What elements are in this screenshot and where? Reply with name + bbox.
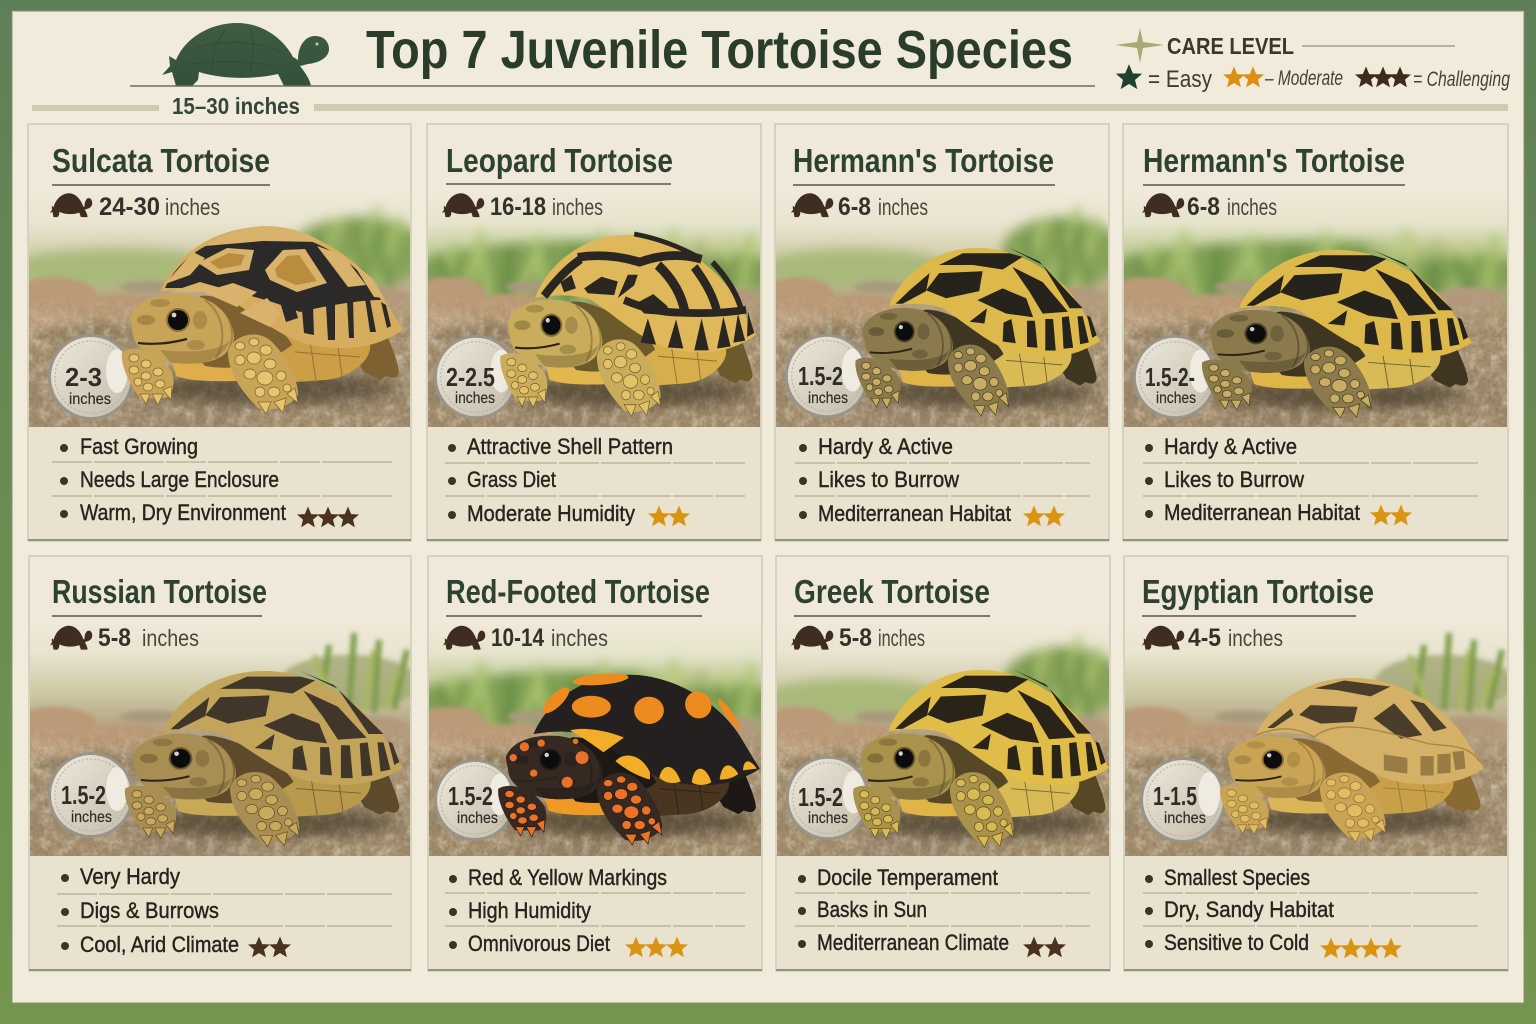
traits: Omnivorous Diet (468, 931, 610, 956)
title: Top 7 Juvenile Tortoise Species (366, 20, 1073, 80)
adult size: 5-8 (98, 624, 131, 652)
heading: Hermann's Tortoise (1143, 142, 1405, 179)
adult size: inches (1228, 625, 1283, 651)
adult size: inches (551, 625, 608, 651)
juvenile size text: inches (808, 810, 848, 827)
juvenile size text: 2-2.5 (446, 362, 495, 392)
rating stars (1320, 938, 1402, 958)
traits: Fast Growing (80, 434, 198, 459)
adult size (442, 193, 603, 221)
juvenile size text (798, 782, 848, 827)
adult size: 10-14 (491, 624, 544, 652)
panel: Egyptian Tortoise (1124, 556, 1508, 972)
traits: Digs & Burrows (80, 898, 219, 923)
panel: Red-Footed Tortoise (428, 556, 762, 972)
challenging key (1355, 66, 1510, 91)
coin size (786, 756, 870, 840)
rating stars (297, 506, 359, 527)
juvenile size text: 1.5-2 (798, 361, 843, 391)
traits: Needs Large Enclosure (80, 467, 279, 492)
adult size: inches (878, 194, 928, 220)
adult size: inches (165, 194, 220, 220)
juvenile size text: inches (69, 391, 111, 408)
adult size: inches (552, 194, 603, 220)
adult size: 6-8 (1187, 193, 1220, 221)
juvenile size text: 1.5-2 (61, 780, 106, 810)
traits (795, 865, 1090, 955)
adult size: inches (1227, 194, 1277, 220)
heading: Russian Tortoise (52, 573, 267, 610)
size range band (32, 93, 1508, 119)
juvenile size text: inches (1164, 810, 1206, 827)
heading: Leopard Tortoise (446, 142, 673, 179)
traits (445, 865, 745, 956)
easy key (1116, 64, 1212, 93)
traits: Cool, Arid Climate (80, 932, 239, 957)
tortoise illustration (498, 672, 760, 845)
adult size (443, 624, 608, 652)
heading: Red-Footed Tortoise (446, 573, 710, 610)
juvenile size text: 1-1.5 (1153, 781, 1197, 811)
icon: sparkle (1115, 28, 1164, 63)
juvenile size text: inches (457, 810, 498, 827)
heading: Greek Tortoise (794, 573, 990, 610)
traits: Likes to Burrow (1164, 467, 1304, 492)
juvenile size text: 1.5-2- (1145, 362, 1195, 392)
coin size (48, 334, 134, 420)
adult size: inches (142, 625, 199, 651)
rating stars (248, 936, 291, 957)
adult size: 16-18 (490, 193, 546, 221)
rating stars (1023, 506, 1065, 526)
traits: Very Hardy (80, 864, 180, 889)
rating stars (1023, 936, 1066, 957)
moderate key: – Moderate (1264, 67, 1343, 90)
adult size (1142, 624, 1283, 652)
juvenile size text: inches (71, 809, 112, 826)
size range band: 15–30 inches (172, 93, 300, 119)
traits (445, 434, 745, 526)
juvenile size text (1153, 781, 1206, 827)
coin size (48, 752, 134, 838)
adult size (791, 193, 928, 221)
panel: Sulcata Tortoise (28, 124, 412, 542)
panel: Greek Tortoise (751, 556, 1124, 971)
traits: Mediterranean Habitat (1164, 500, 1360, 525)
juvenile size text: inches (455, 390, 495, 407)
tortoise illustration (500, 234, 756, 416)
traits: Attractive Shell Pattern (467, 434, 673, 459)
rating stars (648, 506, 690, 526)
traits: Sensitive to Cold (1164, 930, 1309, 955)
legend: care level (1115, 28, 1510, 93)
traits (52, 434, 392, 525)
traits: Docile Temperament (817, 865, 998, 890)
traits: Grass Diet (467, 467, 556, 492)
juvenile size text: 1.5-2 (448, 781, 493, 811)
traits: Red & Yellow Markings (468, 865, 667, 890)
moderate key (1223, 66, 1343, 90)
traits: Mediterranean Habitat (818, 501, 1011, 526)
heading: Hermann's Tortoise (793, 142, 1054, 179)
adult size (1142, 193, 1277, 221)
heading: Sulcata Tortoise (52, 142, 270, 179)
juvenile size text (446, 362, 495, 407)
juvenile size text: 2-3 (65, 362, 102, 392)
adult size (50, 193, 220, 221)
traits: Mediterranean Climate (817, 930, 1009, 955)
adult size: 4-5 (1188, 624, 1221, 652)
heading: Egyptian Tortoise (1142, 573, 1374, 610)
coin size (1133, 335, 1217, 419)
header (32, 20, 1508, 119)
coin size (434, 335, 518, 419)
panel: Hermann's Tortoise (750, 124, 1123, 541)
traits (1143, 865, 1478, 955)
traits: Hardy & Active (1164, 434, 1297, 459)
traits: Hardy & Active (818, 434, 953, 459)
juvenile size text (798, 361, 848, 407)
icon: large tortoise silhouette (162, 23, 329, 86)
panel: Leopard Tortoise (426, 124, 762, 542)
juvenile size text: inches (808, 390, 848, 407)
coin size (1140, 757, 1226, 843)
legend heading: CARE LEVEL (1167, 33, 1294, 59)
traits: Basks in Sun (817, 897, 927, 922)
tortoise illustration (122, 226, 403, 414)
adult size (791, 624, 925, 652)
adult size: 5-8 (839, 624, 872, 652)
traits (1143, 434, 1478, 525)
adult size (50, 624, 199, 652)
easy key: = Easy (1148, 66, 1212, 93)
adult size: inches (878, 625, 925, 651)
traits: Warm, Dry Environment (80, 500, 286, 525)
tortoise illustration (125, 671, 403, 847)
tortoise illustration (1202, 250, 1472, 418)
juvenile size text (448, 781, 498, 827)
coin size (434, 759, 516, 841)
traits: Dry, Sandy Habitat (1164, 897, 1334, 922)
traits (795, 434, 1090, 526)
traits: Likes to Burrow (818, 467, 959, 492)
juvenile size text (65, 362, 111, 408)
traits: Smallest Species (1164, 865, 1310, 890)
juvenile size text: 1.5-2 (798, 782, 843, 812)
panel: Hermann's Tortoise second (1122, 124, 1508, 542)
adult size: 24-30 (99, 193, 160, 221)
rating stars (1370, 504, 1412, 525)
title rule (130, 85, 1095, 87)
panel: Russian Tortoise (28, 556, 412, 972)
traits: Moderate Humidity (467, 501, 635, 526)
rating stars (625, 936, 688, 957)
juvenile size text (61, 780, 112, 826)
tortoise illustration (855, 248, 1100, 416)
traits: High Humidity (468, 898, 591, 923)
tortoise illustration (853, 670, 1109, 848)
juvenile size text (1145, 362, 1196, 407)
coin size (785, 334, 869, 418)
traits (57, 864, 392, 957)
tortoise illustration (1220, 678, 1484, 842)
juvenile size text: inches (1156, 390, 1196, 407)
adult size: 6-8 (838, 193, 871, 221)
